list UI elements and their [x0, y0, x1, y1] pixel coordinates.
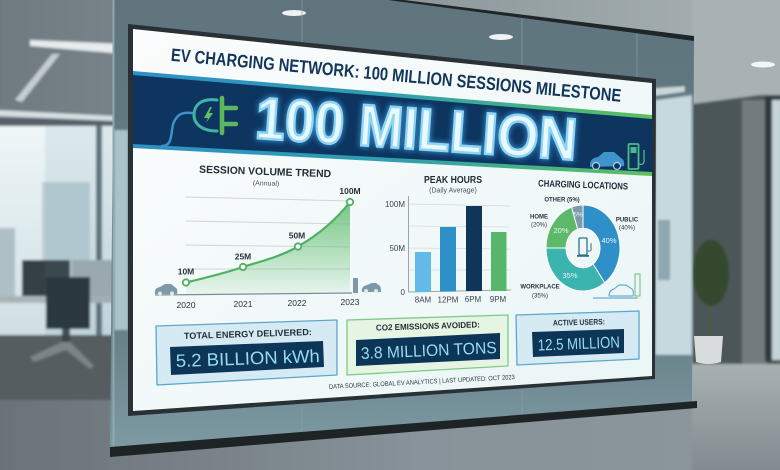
x axis labels: 9PM	[490, 295, 507, 304]
donut labels: (35%)	[532, 294, 548, 300]
trend line	[186, 202, 350, 282]
x axis labels: 12PM	[438, 296, 459, 304]
year labels: 2020	[177, 300, 196, 310]
stat display	[356, 333, 500, 366]
screen frame	[128, 24, 656, 416]
baseline	[155, 293, 352, 295]
data points	[183, 199, 353, 286]
chart heading: PEAK HOURS	[424, 175, 482, 186]
headline: 100 million: 100 MILLION	[253, 85, 579, 173]
chart: peak hours	[385, 175, 511, 304]
icon: car at charger outline	[593, 274, 640, 298]
bars	[415, 206, 506, 292]
x axis labels: 6PM	[465, 295, 482, 304]
donut labels: HOME	[530, 214, 548, 220]
stat label: CO2 EMISSIONS AVOIDED:	[376, 319, 480, 333]
stat display	[532, 329, 624, 357]
year labels: 2023	[341, 297, 360, 307]
year labels: 2022	[288, 298, 307, 308]
year labels: 2021	[234, 299, 253, 309]
y axis labels	[385, 200, 406, 297]
icon: plug with cable	[162, 98, 236, 146]
data labels: 25M	[235, 252, 251, 262]
chart subtitle: (Annual)	[253, 180, 279, 188]
donut labels: WORKPLACE	[520, 284, 560, 290]
donut labels	[520, 198, 639, 300]
y axis labels: 100M	[385, 200, 405, 209]
bottom rail	[110, 401, 697, 457]
donut percentages: 20%	[553, 226, 569, 235]
axes	[408, 196, 511, 292]
donut labels: PUBLIC	[616, 218, 639, 224]
donut percentages: 5%	[573, 212, 583, 218]
y axis labels: 0	[401, 288, 406, 297]
data labels: 100M	[339, 186, 361, 196]
data labels: 50M	[289, 230, 305, 240]
stat card: total energy delivered	[156, 320, 337, 385]
title: EV CHARGING NETWORK: 100 MILLION SESSIONS MILESTONE	[170, 45, 622, 106]
donut percentages	[553, 212, 617, 280]
data labels: 10M	[178, 266, 194, 276]
donut percentages: 40%	[601, 236, 617, 245]
potted plant	[693, 240, 729, 364]
banner	[133, 71, 652, 176]
donut percentages: 35%	[562, 271, 578, 280]
chart subtitle: (Daily Average)	[429, 188, 477, 194]
x axis labels	[415, 295, 507, 304]
icon: car and charger	[590, 144, 644, 170]
stat value: 12.5 MILLION	[538, 334, 620, 355]
stat value: 5.2 BILLION kWh	[175, 346, 320, 371]
stat card: CO2 emissions avoided	[347, 315, 508, 375]
donut labels: (20%)	[531, 222, 547, 228]
donut chart	[546, 205, 620, 291]
headline: 100 million: 100 MILLION	[253, 85, 579, 173]
stat card: active users	[516, 311, 639, 365]
donut labels: OTHER (5%)	[544, 198, 580, 204]
data source footer: DATA SOURCE: GLOBAL EV ANALYTICS | LAST UPDATED: OCT 2023	[329, 374, 515, 391]
screen surface	[133, 29, 652, 411]
stat label: ACTIVE USERS:	[553, 317, 605, 328]
ceiling light	[751, 62, 775, 68]
chart: charging locations	[520, 178, 640, 300]
y axis labels: 50M	[389, 244, 405, 253]
stat label: TOTAL ENERGY DELIVERED:	[184, 327, 312, 341]
year labels	[177, 297, 360, 310]
chart heading: CHARGING LOCATIONS	[538, 178, 628, 193]
top rail	[388, 0, 694, 41]
donut labels: (40%)	[619, 226, 635, 232]
chart heading: SESSION VOLUME TREND	[199, 164, 332, 180]
chart: session volume trend	[155, 164, 381, 310]
icon: charger and car	[353, 278, 381, 293]
data labels	[178, 186, 361, 276]
stat display	[170, 341, 324, 375]
stat value: 3.8 MILLION TONS	[360, 339, 497, 363]
x axis labels: 8AM	[415, 296, 432, 304]
icon: charger in donut centre	[577, 238, 591, 257]
area under trend line	[186, 202, 350, 294]
glass partition	[110, 0, 694, 449]
icon: small car	[155, 284, 177, 296]
